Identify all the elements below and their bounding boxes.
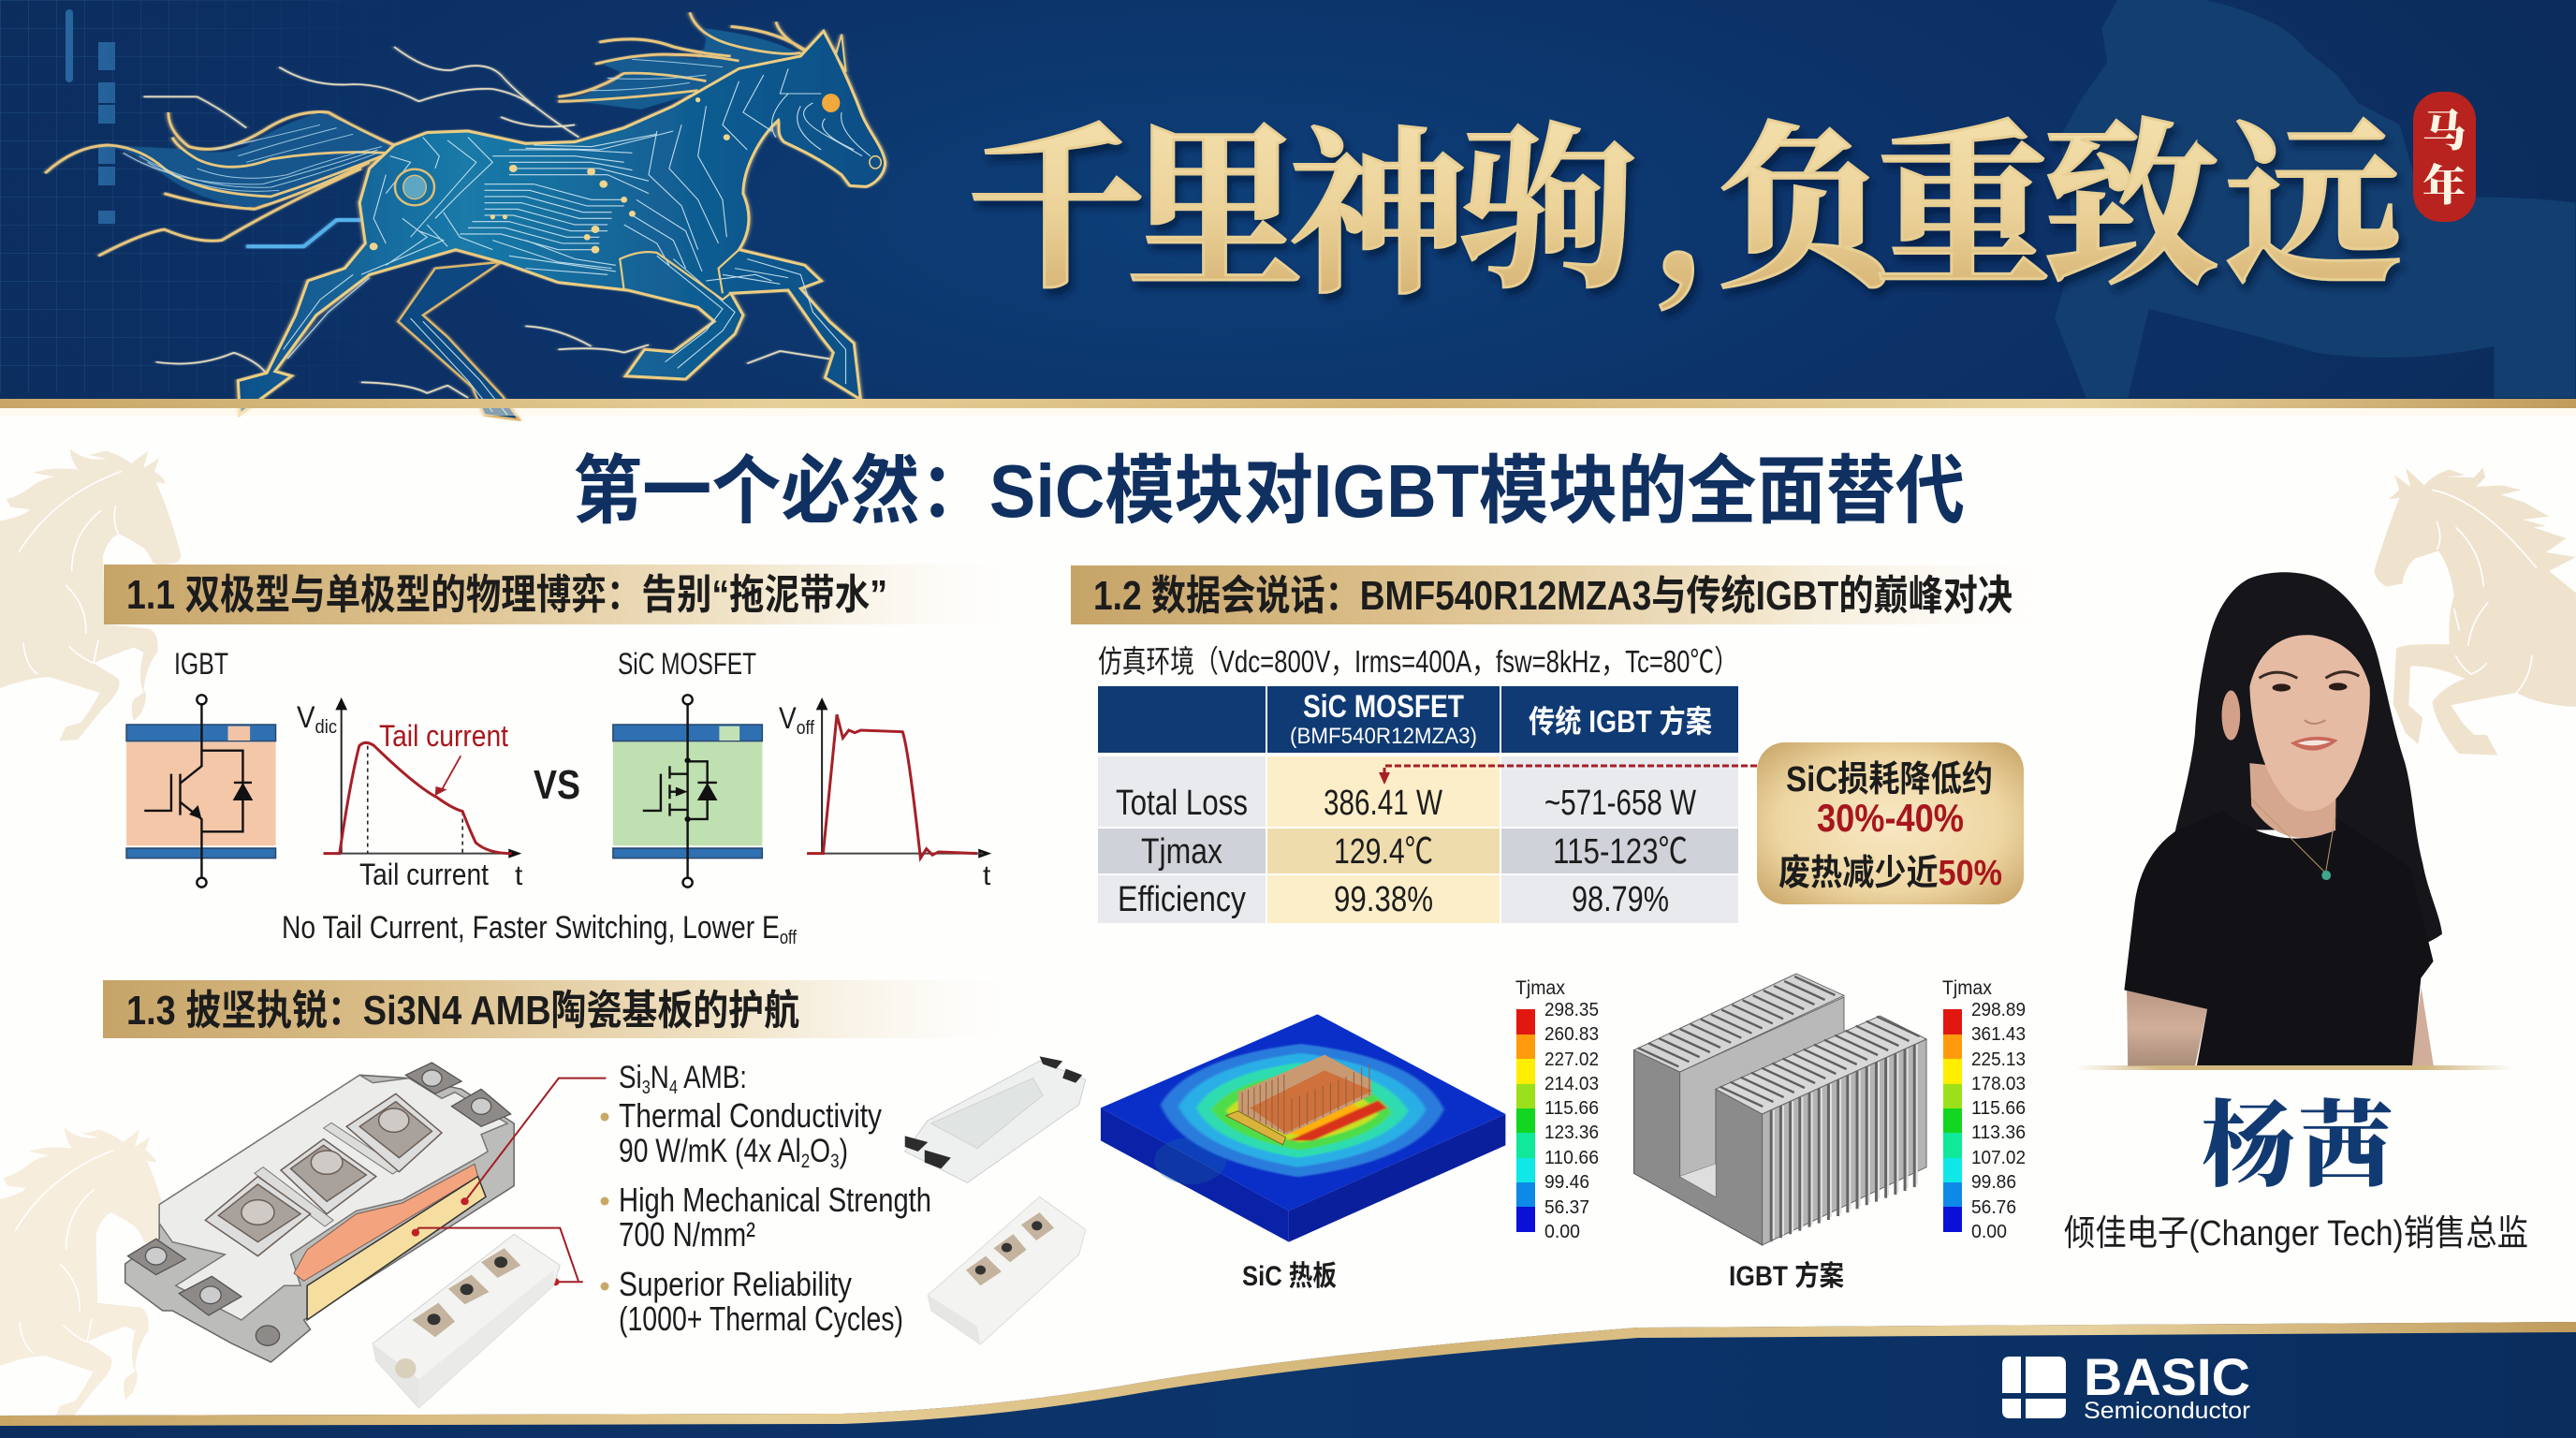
callout: SiC loss reduction xyxy=(1757,742,2024,904)
row: Total Loss: ~571-658 W xyxy=(1544,784,1696,823)
item: thermal conductivity xyxy=(601,1096,882,1172)
legend values: 225.13 xyxy=(1971,1049,2026,1070)
section 1.3 header: 1.3 披坚执锐：Si3N4 AMB陶瓷基板的护航 xyxy=(126,976,799,1036)
label: IGBT: IGBT xyxy=(174,647,228,681)
arm right xyxy=(2410,988,2434,1066)
label: SiC MOSFET: SiC MOSFET xyxy=(618,647,756,681)
item: thermal conductivity: 90 W/mK (4x Al xyxy=(619,1133,844,1169)
caption: off xyxy=(780,928,797,948)
circuit traces on horse xyxy=(284,68,871,415)
module top face xyxy=(159,1075,507,1320)
label: t axis: t xyxy=(983,860,991,891)
IGBT waveform xyxy=(324,697,521,858)
separator bars xyxy=(255,1123,401,1226)
Si3N4 feature list xyxy=(601,1060,931,1338)
item: mechanical strength: High Mechanical Strength xyxy=(619,1181,931,1219)
callout: SiC loss reduction: 30%-40% xyxy=(1817,796,1964,840)
table header row: (BMF540R12MZA3) xyxy=(1290,724,1477,749)
SiC waveform xyxy=(807,697,991,858)
list heading: AMB: xyxy=(678,1060,747,1095)
VS label: VS xyxy=(534,762,580,808)
row: Efficiency xyxy=(1098,875,1738,923)
mouth xyxy=(2291,737,2338,751)
tail xyxy=(45,112,394,256)
ear xyxy=(2222,691,2240,741)
BASIC Semiconductor logo: Semiconductor xyxy=(2084,1398,2250,1424)
gold band under banner xyxy=(0,399,2576,416)
comparison table xyxy=(1098,686,1738,923)
seal: 马年 xyxy=(2413,92,2476,222)
legend values: 123.36 xyxy=(1544,1123,1599,1143)
legend values: 298.35 xyxy=(1544,1000,1599,1020)
legend values: 214.03 xyxy=(1544,1074,1599,1094)
legend values: 0.00 xyxy=(1971,1222,2007,1242)
callout: SiC loss reduction: 废热减少近50% xyxy=(1778,854,2002,893)
table header row: 传统 IGBT 方案 xyxy=(1529,704,1712,739)
item: thermal conductivity: 2 xyxy=(801,1151,810,1172)
table header row xyxy=(1098,686,1738,753)
leader lines xyxy=(416,1078,606,1282)
item: reliability: (1000+ Thermal Cycles) xyxy=(619,1299,903,1338)
shadow blob xyxy=(1154,1137,1226,1184)
row: Tjmax: Tjmax xyxy=(1141,832,1222,872)
dashed arrow to SiC cell xyxy=(1379,766,1757,785)
tech grid background xyxy=(0,0,333,393)
legend values: 99.86 xyxy=(1971,1172,2016,1193)
section 1.1 diagram xyxy=(126,647,991,948)
item: thermal conductivity: 3 xyxy=(830,1151,840,1172)
label: Tail current (red): Tail current xyxy=(379,719,508,753)
watermark horse: upper left xyxy=(0,448,181,741)
IGBT device schematic xyxy=(126,695,276,888)
legend values: 0.00 xyxy=(1544,1222,1580,1242)
footer xyxy=(0,1322,2576,1438)
speaker portrait xyxy=(2124,572,2442,1066)
legend values: 56.76 xyxy=(1971,1197,2016,1218)
item: thermal conductivity: ) xyxy=(840,1133,848,1169)
divider under portrait xyxy=(2075,1065,2513,1070)
banner title: 千里神驹,负重致远 xyxy=(967,64,2403,329)
row: Total Loss xyxy=(1098,756,1738,827)
list heading: N xyxy=(651,1060,669,1095)
SiC MOSFET device schematic xyxy=(613,695,762,888)
legend colour scale xyxy=(1943,1009,1962,1232)
black top xyxy=(2124,811,2434,1066)
SiC thermal plate model xyxy=(1101,1014,1505,1242)
necklace xyxy=(2251,799,2335,880)
item: mechanical strength xyxy=(601,1181,931,1254)
item: reliability: Superior Reliability xyxy=(619,1265,852,1303)
legend values: 115.66 xyxy=(1971,1098,2026,1119)
row: Total Loss: 386.41 W xyxy=(1324,784,1442,823)
electric wires xyxy=(144,47,829,398)
legend values: 298.89 xyxy=(1971,1000,2026,1020)
seal: 马年: 马年 xyxy=(2422,97,2466,213)
temperature legend: SiC: Tjmax xyxy=(1515,977,1565,999)
arm left xyxy=(2127,990,2207,1066)
label: Vdic axis: V xyxy=(297,700,316,734)
watermark horse in banner xyxy=(2055,0,2575,398)
header banner xyxy=(0,0,2576,399)
row: Efficiency: 98.79% xyxy=(1572,880,1669,919)
heat fin block xyxy=(1226,1055,1372,1145)
horse body xyxy=(238,31,886,415)
item: thermal conductivity: Thermal Conductivity xyxy=(619,1096,882,1135)
row: Efficiency: 99.38% xyxy=(1334,880,1433,919)
legend values: 361.43 xyxy=(1971,1024,2026,1045)
far hind leg xyxy=(398,262,519,419)
white module product: top right xyxy=(905,1056,1086,1182)
row: Efficiency: Efficiency xyxy=(1118,880,1246,919)
legend values: 99.46 xyxy=(1544,1172,1589,1193)
callout: SiC loss reduction: SiC损耗降低约 xyxy=(1786,760,1993,800)
legend values xyxy=(1544,1000,1599,1242)
label: IGBT solution: IGBT 方案 xyxy=(1729,1261,1844,1292)
row: Tjmax: 115-123℃ xyxy=(1553,832,1688,872)
temperature legend: IGBT: Tjmax xyxy=(1942,977,1992,999)
label: t axis: t xyxy=(515,860,523,891)
white module product: bottom right xyxy=(928,1196,1086,1344)
BASIC Semiconductor logo xyxy=(2002,1347,2250,1424)
legend values: 260.83 xyxy=(1544,1024,1599,1045)
eye xyxy=(822,94,840,112)
mane xyxy=(558,12,809,110)
item: thermal conductivity: O xyxy=(810,1133,830,1169)
temperature legend: SiC xyxy=(1515,977,1599,1242)
IGBT heat sink model xyxy=(1634,974,1926,1245)
section 1.2 header: 1.2 数据会说话：BMF540R12MZA3与传统IGBT的巅峰对决 xyxy=(1093,562,2012,622)
list heading: 3 xyxy=(642,1078,651,1098)
legend values: 107.02 xyxy=(1971,1148,2026,1168)
main heading: 第一个必然：SiC模块对IGBT模块的全面替代 xyxy=(573,431,1965,539)
row: Total Loss: Total Loss xyxy=(1116,784,1248,823)
second ear xyxy=(836,35,846,72)
eyebrows xyxy=(2260,672,2359,678)
legend values xyxy=(1971,1000,2026,1242)
item: mechanical strength: 700 N/mm² xyxy=(619,1215,755,1254)
glowing circuit trace xyxy=(246,220,394,246)
caption: No Tail Current, Faster Switching, Lower E xyxy=(282,910,881,946)
list heading: Si xyxy=(619,1060,647,1095)
row: Tjmax: 129.4℃ xyxy=(1334,832,1433,872)
legend values: 227.02 xyxy=(1544,1049,1599,1070)
watermark horse: right xyxy=(2375,467,2576,756)
face xyxy=(2249,632,2370,811)
legend values: 113.36 xyxy=(1971,1123,2026,1143)
forehead hair xyxy=(2241,582,2370,686)
label: Voff axis: off xyxy=(797,718,814,739)
circuit nodes xyxy=(370,97,730,254)
hair xyxy=(2174,572,2442,943)
table header row: SiC MOSFET xyxy=(1303,689,1464,725)
neck xyxy=(2249,763,2336,838)
horse illustration xyxy=(45,12,886,419)
nostril xyxy=(870,156,881,169)
watermark horse: lower left xyxy=(0,1127,170,1420)
simulation conditions: 仿真环境（Vdc=800V，Irms=400A，fsw=8kHz，Tc=80℃） xyxy=(1098,637,1738,682)
legend values: 178.03 xyxy=(1971,1074,2026,1094)
module base xyxy=(125,1075,514,1362)
legend values: 56.37 xyxy=(1544,1197,1589,1218)
section 1.1 header: 1.1 双极型与单极型的物理博弈：告别“拖泥带水” xyxy=(126,561,887,621)
Si3N4 ceramic layers xyxy=(294,1164,486,1320)
label: SiC thermal plate: SiC 热板 xyxy=(1242,1261,1337,1292)
white module product: front xyxy=(373,1234,560,1408)
BASIC Semiconductor logo: BASIC xyxy=(2084,1347,2250,1406)
thermal contours xyxy=(1161,1044,1444,1177)
speaker name: 杨茜 xyxy=(2202,1070,2393,1205)
leg lines xyxy=(456,250,739,300)
label: Vdic axis: dic xyxy=(315,717,337,738)
legend colour scale xyxy=(1516,1009,1535,1232)
label: Voff axis: V xyxy=(779,701,798,735)
nose xyxy=(2305,720,2325,724)
gear emblem xyxy=(395,169,434,205)
item: reliability xyxy=(601,1265,903,1338)
legend values: 115.66 xyxy=(1544,1098,1599,1119)
eyes xyxy=(2273,682,2347,692)
legend values: 110.66 xyxy=(1544,1148,1599,1168)
corner terminals xyxy=(127,1063,511,1345)
row: Tjmax xyxy=(1098,829,1738,873)
teeth xyxy=(2297,741,2331,745)
label: Tail current axis: Tail current xyxy=(359,858,489,891)
power module cutaway xyxy=(125,1063,606,1362)
large terminals xyxy=(205,1093,442,1256)
temperature legend: IGBT xyxy=(1942,977,2026,1242)
list heading: 4 xyxy=(669,1078,678,1098)
